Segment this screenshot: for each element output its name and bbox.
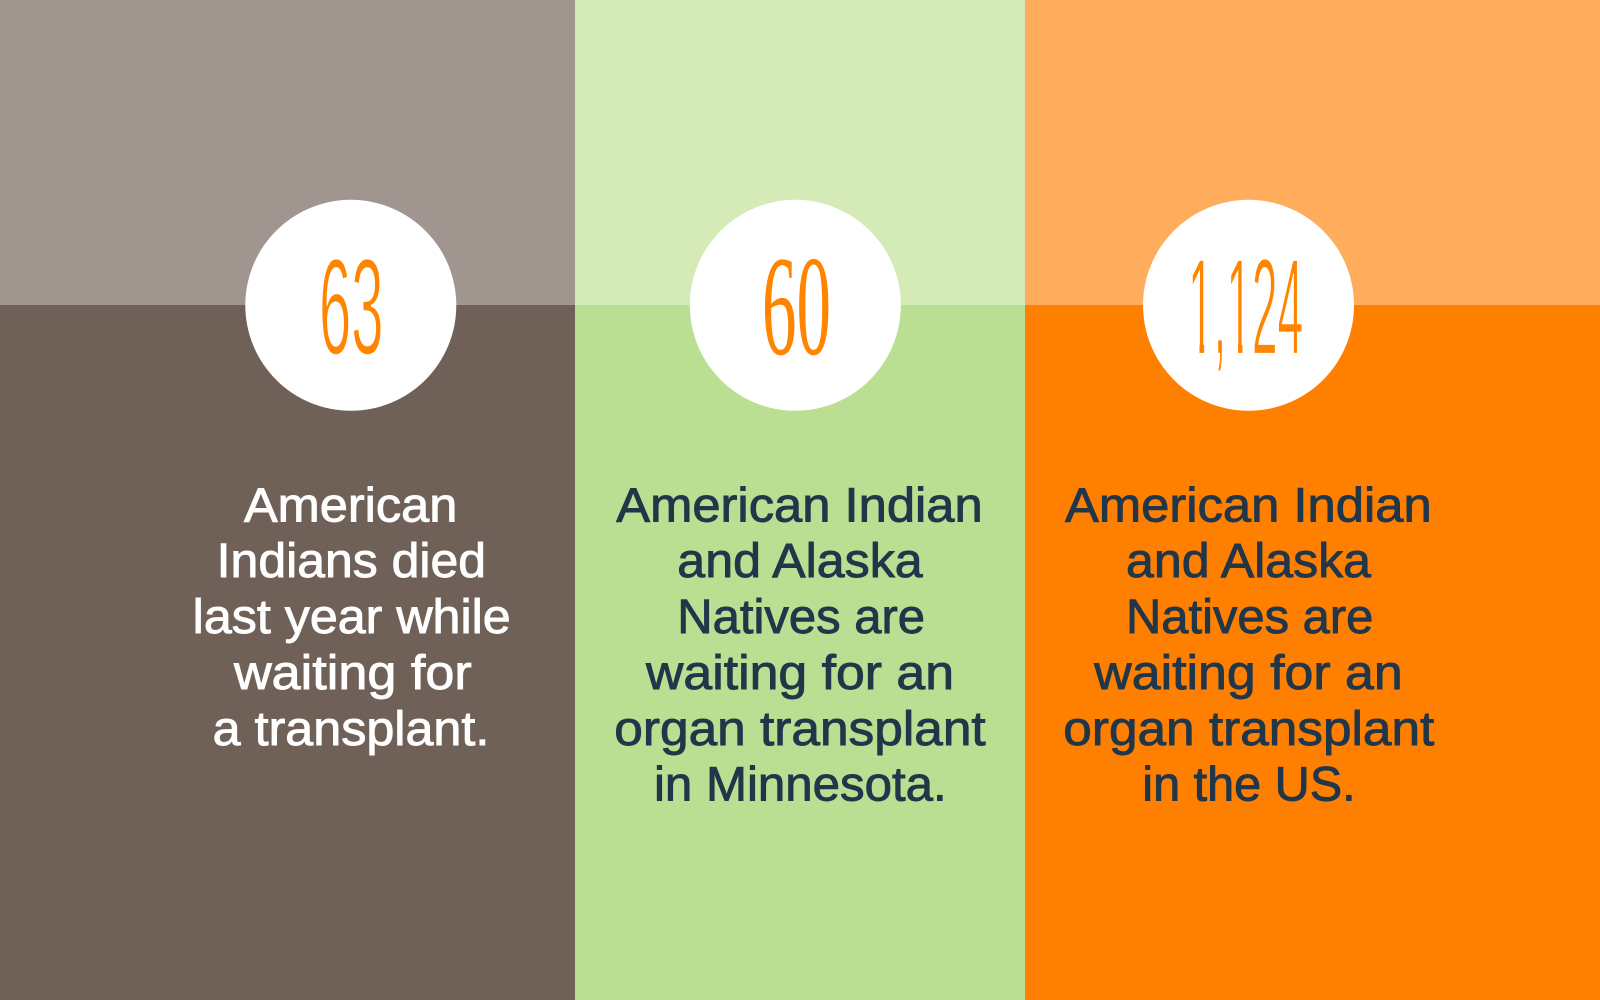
text: American Indian and Alaska Natives are waiting for an organ transplant in the US: in the US. — [1142, 759, 1356, 812]
text: American Indian and Alaska Natives are waiting for an organ transplant in the US: American Indian — [1065, 480, 1432, 533]
text: American Indian and Alaska Natives are waiting for an organ transplant in Minnesota: Natives are — [677, 591, 925, 644]
text: American Indians died last year while waiting for a transplant: Indians died — [217, 535, 486, 588]
circle: 60: 60 — [762, 228, 831, 386]
text: American Indian and Alaska Natives are waiting for an organ transplant in Minnesota — [614, 480, 986, 812]
text: American Indians died last year while waiting for a transplant: last year while — [193, 591, 511, 644]
circle: 60 — [690, 200, 901, 411]
text: American Indian and Alaska Natives are waiting for an organ transplant in Minnesota: organ transplant — [614, 703, 986, 756]
panel: American Indians died — [0, 0, 575, 1000]
panel: waiting in the US — [1025, 0, 1600, 1000]
circle: 1,124 — [1143, 200, 1354, 411]
text: American Indians died last year while waiting for a transplant: American — [244, 480, 457, 533]
text: American Indian and Alaska Natives are waiting for an organ transplant in the US: and Alaska — [1126, 535, 1371, 588]
text: American Indian and Alaska Natives are waiting for an organ transplant in Minnesota: American Indian — [616, 480, 983, 533]
circle: 1,124: 1,124 — [1188, 229, 1303, 383]
circle: 63: 63 — [319, 232, 384, 384]
text: American Indian and Alaska Natives are waiting for an organ transplant in the US: organ transplant — [1063, 703, 1434, 756]
text: American Indian and Alaska Natives are waiting for an organ transplant in the US: waiting for an — [1093, 647, 1403, 700]
text: American Indian and Alaska Natives are waiting for an organ transplant in Minnesota: waiting for an — [645, 647, 954, 700]
text: American Indians died last year while waiting for a transplant: waiting for — [233, 647, 472, 700]
text: American Indian and Alaska Natives are waiting for an organ transplant in Minnesota: in Minnesota. — [654, 759, 947, 812]
text: American Indian and Alaska Natives are waiting for an organ transplant in the US: Natives are — [1126, 591, 1373, 644]
circle: 63 — [245, 200, 456, 411]
text: American Indian and Alaska Natives are waiting for an organ transplant in the US — [1063, 480, 1434, 812]
text: American Indians died last year while waiting for a transplant — [193, 480, 511, 756]
panel: waiting in Minnesota — [575, 0, 1025, 1000]
text: American Indian and Alaska Natives are waiting for an organ transplant in Minnesota: and Alaska — [677, 535, 923, 588]
text: American Indians died last year while waiting for a transplant: a transplant. — [213, 703, 489, 756]
